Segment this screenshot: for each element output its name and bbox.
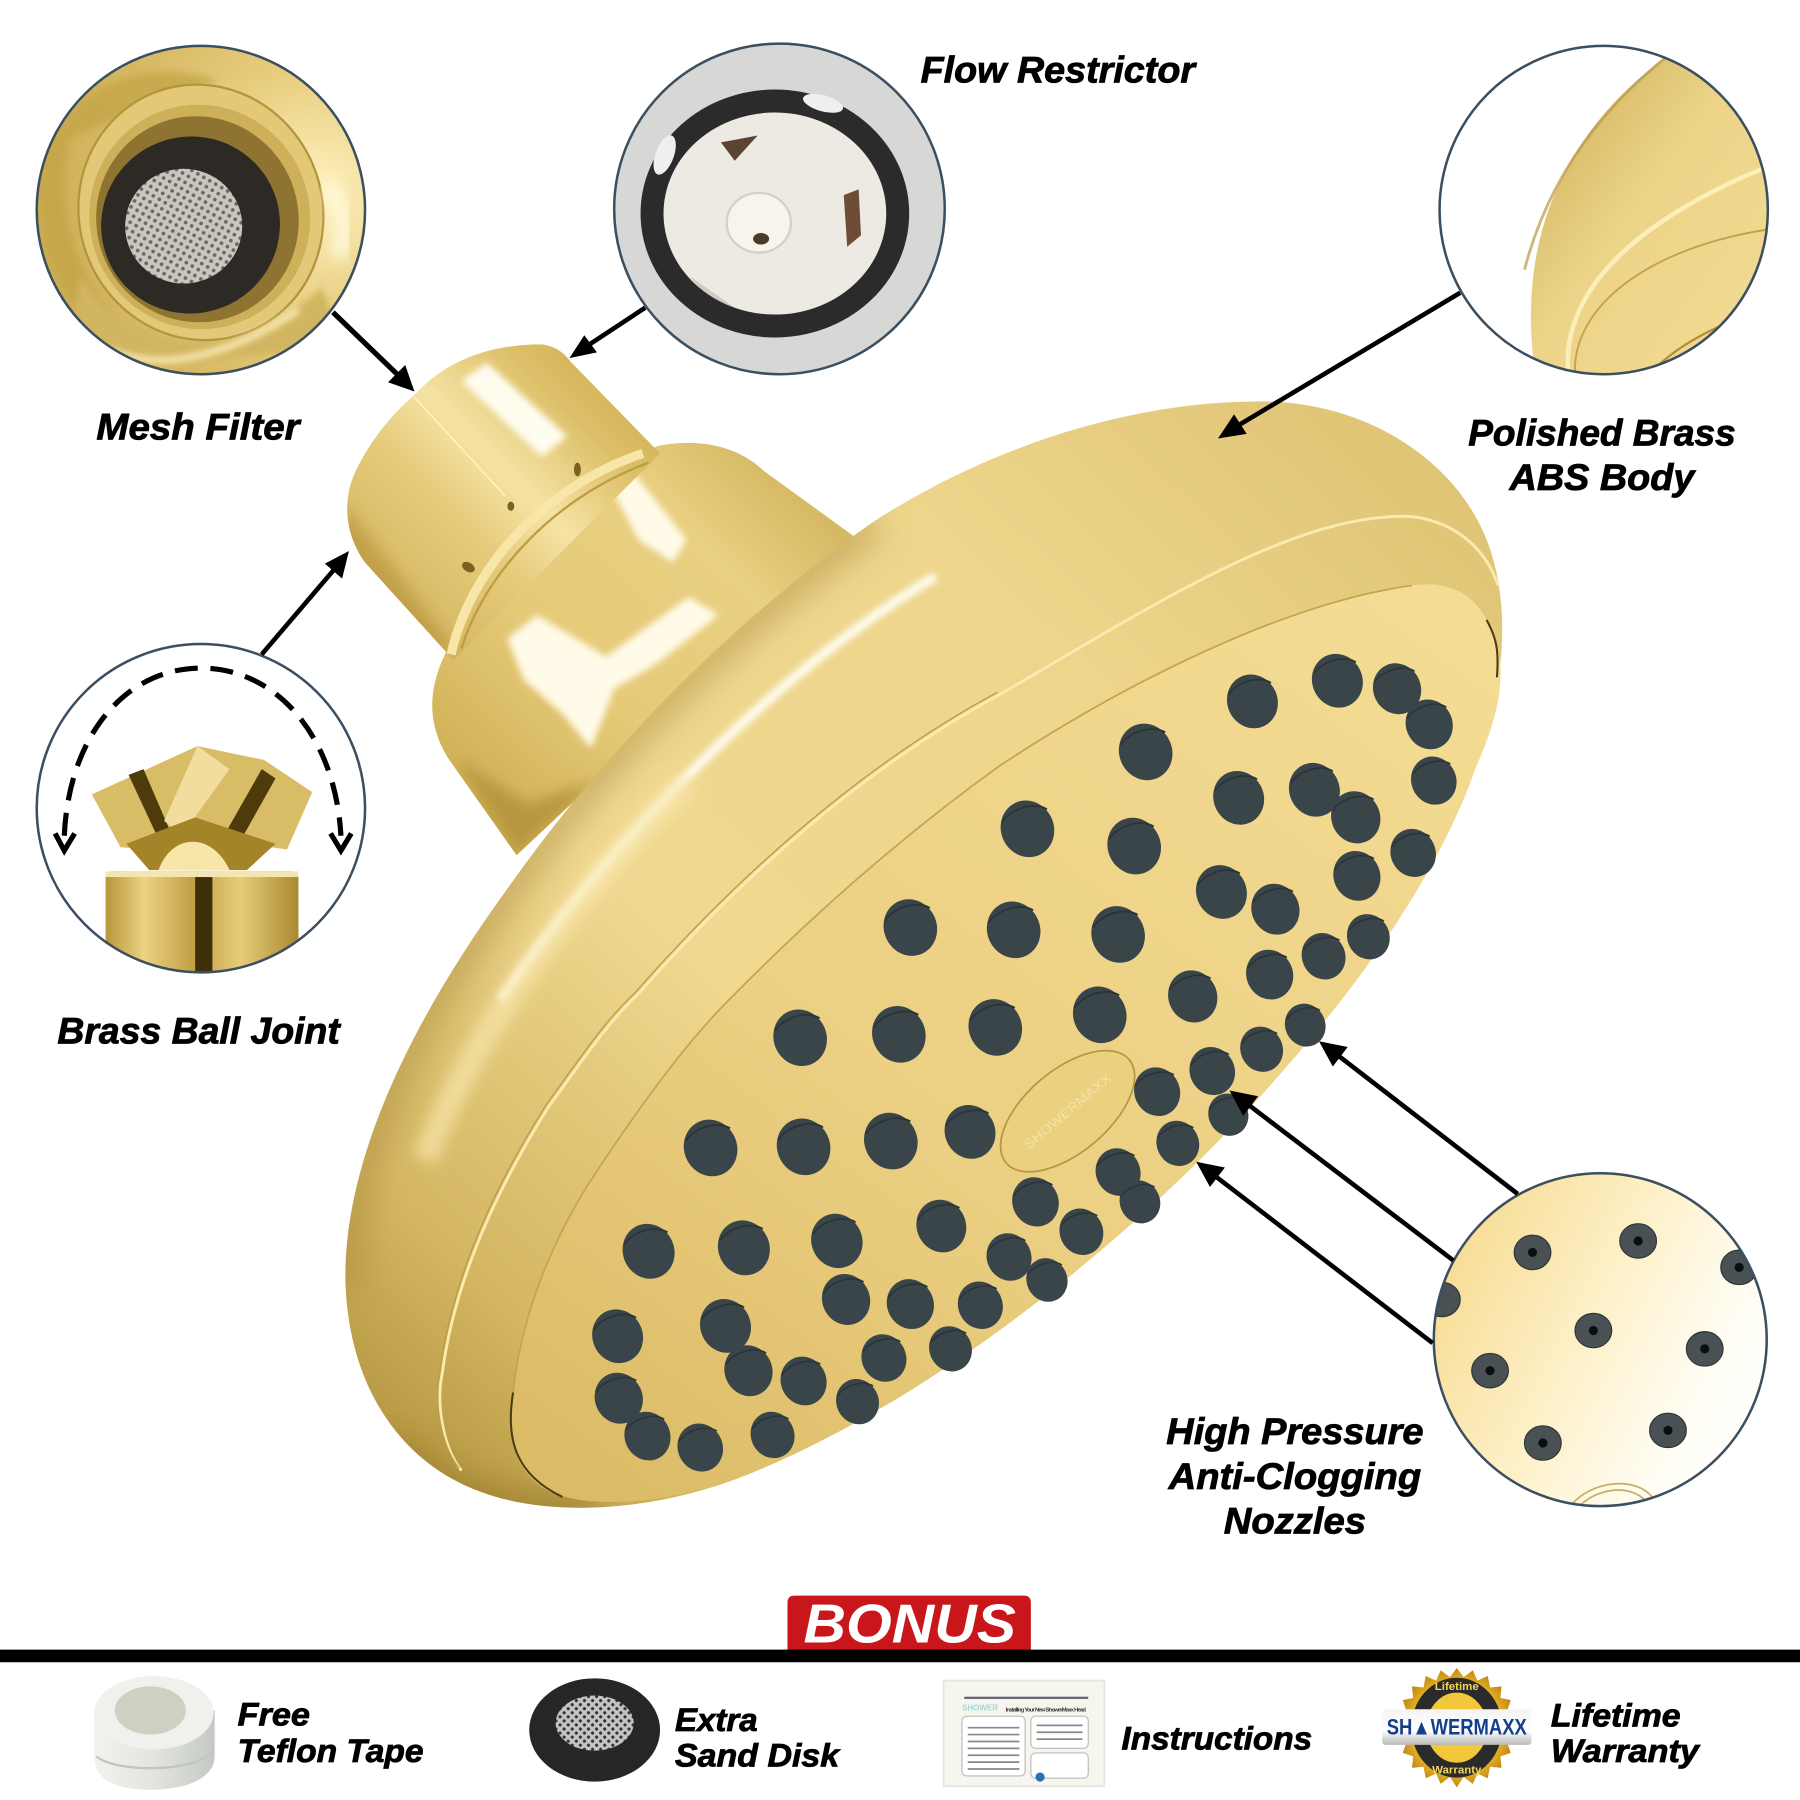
spray face [511, 584, 1501, 1502]
text: lifetime warranty [1551, 1698, 1701, 1769]
panel: polished brass body detail [1435, 40, 1774, 379]
icon: instruction sheet: SHOWER [962, 1703, 998, 1712]
arrow: flow restrictor [569, 308, 645, 358]
icon: warranty seal: Lifetime [1435, 1681, 1479, 1693]
icon: warranty seal: SH▲WERMAXX [1387, 1715, 1527, 1740]
text: extra sand disk: Extra [675, 1702, 758, 1738]
label: high pressure nozzles: Anti-Clogging [1168, 1456, 1421, 1497]
lower neck [432, 443, 855, 855]
icon: tape roll [94, 1676, 215, 1790]
panel: nozzle detail [1423, 1171, 1774, 1510]
panel: mesh filter detail [34, 44, 367, 379]
text: instructions: Instructions [1122, 1720, 1312, 1756]
text: free teflon tape: Teflon Tape [238, 1733, 424, 1769]
ball joint wings [92, 746, 312, 849]
icon: instruction sheet [944, 1681, 1104, 1786]
shower head illustration [339, 344, 1502, 1510]
text: extra sand disk: Sand Disk [675, 1738, 841, 1774]
label: polished brass abs body: Polished Brass [1468, 412, 1736, 453]
panel: flow restrictor detail [608, 40, 953, 379]
icon: sand disk [529, 1678, 660, 1782]
text: lifetime warranty: Lifetime [1551, 1698, 1681, 1734]
label: polished brass abs body [1468, 412, 1736, 498]
label: high pressure nozzles: High Pressure [1166, 1411, 1423, 1452]
arrow: mesh filter [333, 312, 414, 391]
label: high pressure nozzles [1166, 1411, 1423, 1542]
ball joint base [106, 871, 298, 980]
text: extra sand disk [675, 1702, 841, 1774]
brand oval: SHOWERMAXX [1021, 1070, 1114, 1152]
text: free teflon tape [238, 1696, 424, 1769]
rotation dashed arc [64, 668, 341, 836]
rim groove line [440, 516, 1498, 1471]
arrow: nozzle three [1196, 1162, 1433, 1343]
arrow: ball joint [262, 551, 349, 654]
bonus item: teflon tape [94, 1676, 424, 1790]
arrow: nozzle two [1229, 1091, 1453, 1260]
arrow: nozzle one [1319, 1041, 1518, 1194]
label: mesh filter: Mesh Filter [96, 407, 301, 448]
arrow: polished body [1218, 293, 1460, 439]
label: flow restrictor: Flow Restrictor [921, 50, 1197, 91]
panel: ball joint detail [34, 643, 367, 980]
upper cylinder inlet [339, 344, 660, 660]
bonus badge: BONUS [804, 1593, 1016, 1655]
icon: warranty seal: Warranty [1432, 1765, 1482, 1777]
head body rim [345, 401, 1502, 1510]
text: free teflon tape: Free [238, 1696, 310, 1732]
mesh screen [125, 169, 242, 284]
bonus item: lifetime warranty [1382, 1668, 1701, 1787]
label: polished brass abs body: ABS Body [1509, 457, 1696, 498]
icon: instruction sheet: Installing Your New ShowerMaxx Head [1006, 1708, 1086, 1714]
label: high pressure nozzles: Nozzles [1224, 1501, 1366, 1542]
brand oval [979, 1028, 1156, 1195]
rotation arrowheads [55, 833, 351, 851]
icon: warranty seal [1382, 1668, 1531, 1787]
bonus item: instructions [944, 1681, 1312, 1786]
text: lifetime warranty: Warranty [1551, 1733, 1701, 1769]
label: brass ball joint: Brass Ball Joint [57, 1010, 342, 1051]
divider bar [0, 1650, 1800, 1662]
bonus item: extra sand disk [529, 1678, 841, 1782]
nozzles [583, 645, 1464, 1479]
